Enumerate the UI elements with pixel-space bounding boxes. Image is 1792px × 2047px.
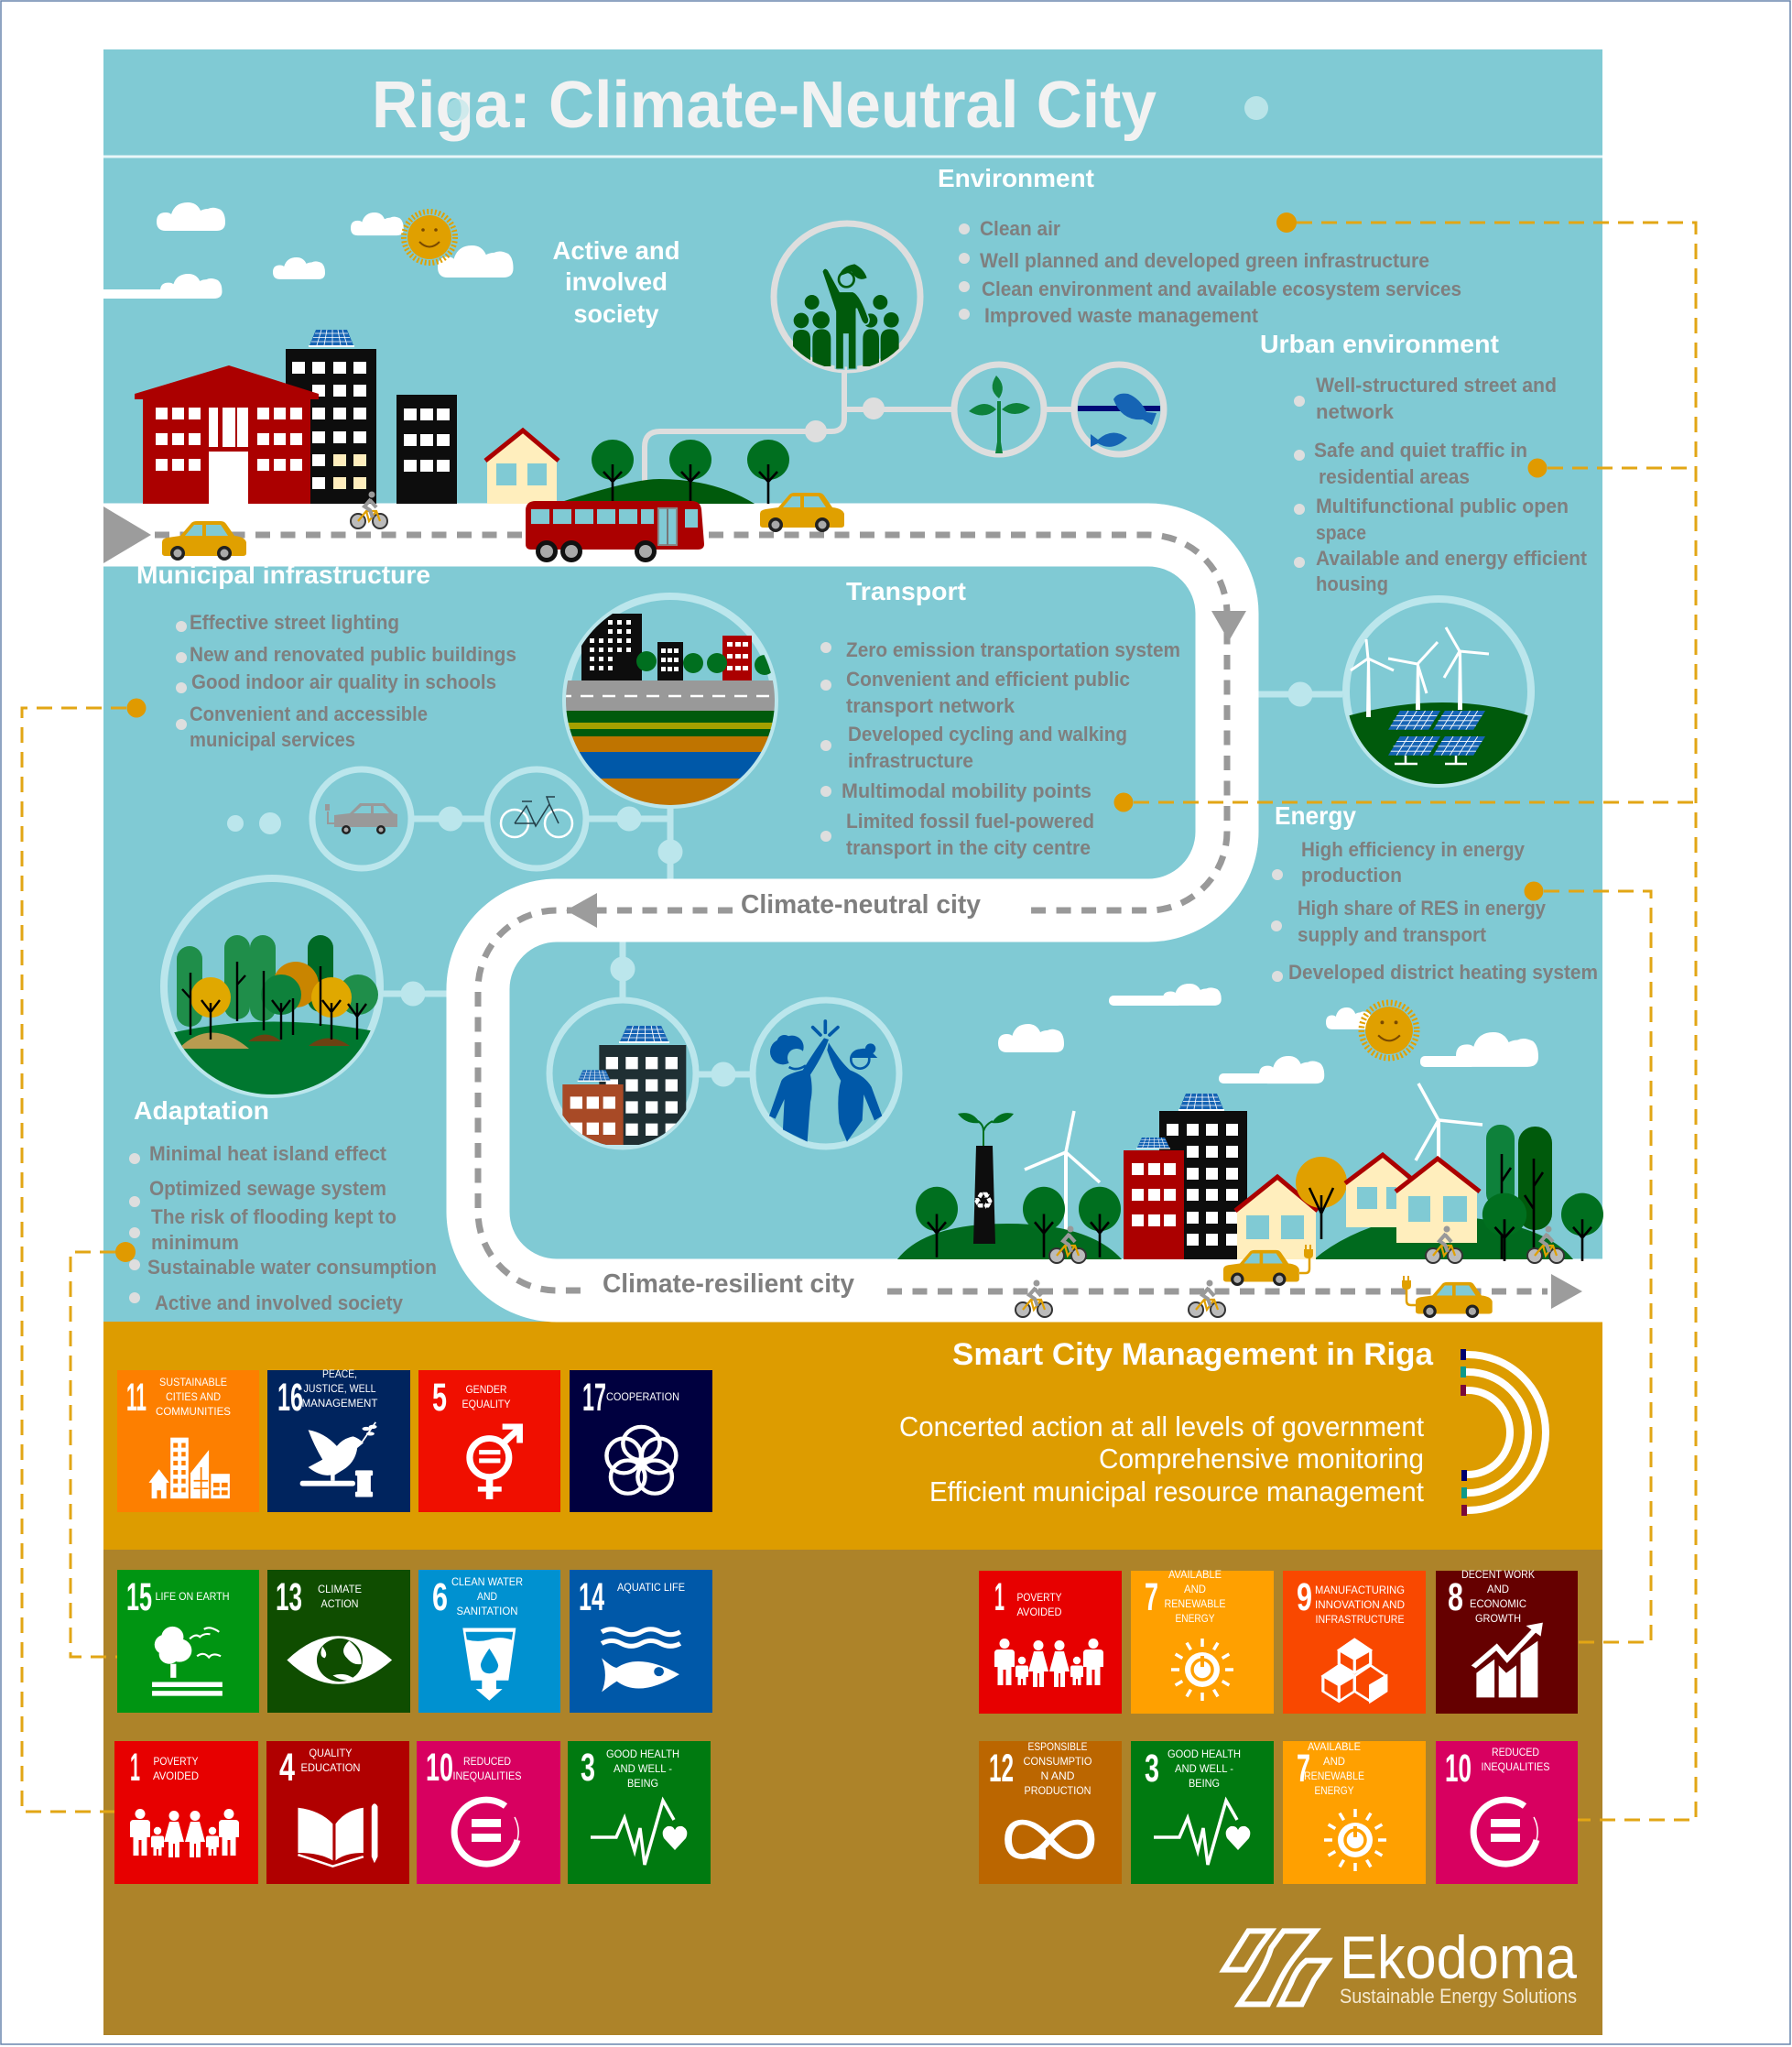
SDG tile 10 right [1436,1741,1578,1884]
text block: energy: Developed district heating system [1288,961,1598,984]
text block: urban environment: housing [1316,572,1388,595]
SDG tile 14 [570,1570,712,1713]
icon: energy circle [1337,599,1538,797]
vehicles on bottom road [1015,1245,1493,1318]
SDG tile 1 left: 1 [130,1746,140,1790]
SDG tile 11: COMMUNITIES [156,1405,231,1418]
road label: climate-resilient city: Climate-resilient city [603,1269,854,1299]
scene: right city: ♻ [972,1188,994,1215]
panel: teal climate section background [103,49,1602,1322]
text block: energy: supply and transport [1298,923,1487,946]
SDG tile 7 upper [1131,1568,1274,1714]
icon: transport infrastructure circle [559,596,778,811]
text block: transport [820,577,1180,859]
text block: smart city management: Concerted action at all levels of government [899,1410,1424,1443]
SDG tile 10 left: REDUCED [463,1755,511,1768]
text block: urban environment: Urban environment [1260,330,1499,358]
icon: electric car circle [312,769,411,868]
SDG tile 6: 6 [432,1575,448,1619]
SDG tile 5 [418,1370,560,1512]
SDG tile 13: ACTION [320,1597,359,1610]
SDG tile 4: 4 [279,1746,295,1790]
SDG tile 9 [1283,1571,1426,1714]
text block: adaptation [129,1096,437,1314]
SDG tile 7 upper: RENEWABLE [1165,1597,1225,1610]
text block: urban environment: residential areas [1319,465,1470,488]
text block: smart city management: Comprehensive monitoring [1099,1443,1424,1475]
text block: transport: Transport [846,577,966,605]
text block: transport: transport in the city centre [846,836,1091,859]
icon: buildings circle [549,1000,696,1147]
SDG tile 4 [266,1741,409,1884]
arrow: down on right bend [1211,611,1246,641]
SDG tile 10 right: REDUCED [1492,1746,1539,1758]
SDG tile 11: CITIES AND [166,1390,221,1403]
SDG tile 7 lower: RENEWABLE [1304,1769,1364,1782]
SDG tile 7 lower: AVAILABLE [1308,1740,1361,1753]
text block: environment: Clean air [980,217,1060,240]
SDG tile 8: AND [1487,1583,1509,1595]
SDG tile 3 left: AND WELL - [614,1762,672,1775]
text block: energy: High share of RES in energy [1298,897,1547,920]
SDG tile 16: 16 [277,1376,303,1420]
SDG tile 7 lower [1283,1740,1426,1884]
SDG tile 7 lower: AND [1323,1755,1345,1768]
text block: urban environment: Safe and quiet traffic in [1314,439,1527,462]
text block: environment [938,164,1461,327]
connectors: grey society branch [645,371,1071,481]
SDG tile 3 right: GOOD HEALTH [1168,1748,1241,1760]
SDG tile 14: 14 [579,1575,604,1619]
text block: municipal infrastructure [136,561,516,751]
text block: transport: Multimodal mobility points [842,779,1091,802]
scene: left city buildings [135,330,789,504]
text block: urban environment [1260,330,1588,595]
logo: Ekodoma: Ekodoma [1340,1923,1577,1991]
text block: municipal infrastructure: Convenient and accessible [190,702,428,725]
SDG tile 17: COOPERATION [606,1390,679,1403]
text block: smart city management: Smart City Management in Riga [952,1337,1434,1372]
SDG tile 8: 8 [1448,1575,1463,1619]
arrow: road end [1551,1274,1582,1309]
SDG tile 6: CLEAN WATER [451,1575,523,1588]
icon: bicycle circle [487,769,586,868]
text block: municipal infrastructure: Effective street lighting [190,611,399,634]
text block: transport: transport network [846,694,1015,717]
SDG tile 5: GENDER [465,1383,507,1396]
text block: urban environment: network [1316,400,1395,423]
SDG tile 11 [117,1370,259,1512]
SDG tile 12: 12 [989,1747,1014,1791]
SDG tile 1 left: POVERTY [154,1755,198,1768]
SDG tile 13: CLIMATE [318,1583,362,1595]
text block: transport: Zero emission transportation system [846,638,1180,661]
SDG tile 7 upper: ENERGY [1176,1612,1214,1625]
icon: plant circle [954,365,1044,454]
logo: Ekodoma [1224,1923,1577,2008]
text block: municipal infrastructure: Municipal infrastructure [136,561,430,589]
scene: left city sky [103,202,513,299]
SDG tile 11: SUSTAINABLE [159,1376,227,1388]
SDG tile 1 right: AVOIDED [1016,1606,1062,1618]
SDG tile 16: PEACE, [322,1367,357,1380]
SDG tile 1 left: AVOIDED [153,1769,199,1782]
text block: active and involved society [553,236,679,328]
SDG tile 7 upper: AND [1184,1583,1206,1595]
SDG tile 16 [267,1367,410,1512]
title: Riga: Climate-Neutral City [372,69,1157,142]
SDG tile 10 left [417,1741,560,1884]
SDG tile 10 right: INEQUALITIES [1482,1760,1549,1773]
arrow: road start [103,506,151,563]
SDG tile 10 left: 10 [426,1746,453,1790]
SDG tile 8: GROWTH [1475,1612,1521,1625]
dashed connector lines [22,223,1696,1820]
SDG tile 15: 15 [126,1575,152,1619]
SDG tile 7 lower: ENERGY [1315,1784,1353,1797]
SDG tile 3 left [568,1741,711,1884]
SDG tile 8: ECONOMIC [1470,1597,1526,1610]
SDG tile 16: JUSTICE, WELL [304,1382,376,1395]
SDG tile 6: SANITATION [456,1605,518,1617]
text block: adaptation: Active and involved society [155,1291,404,1314]
text block: transport: infrastructure [848,749,973,772]
text block: municipal infrastructure: New and renovated public buildings [190,643,516,666]
text block: adaptation: Sustainable water consumption [147,1256,437,1279]
SDG tile 3 right [1131,1741,1274,1884]
panel: brown SDG and logo background [103,1550,1602,2035]
SDG tile 1 right: 1 [994,1575,1005,1619]
SDG tile 10 left: INEQUALITIES [452,1769,522,1782]
text block: energy: Energy [1275,801,1356,830]
text block: environment: Environment [938,164,1094,192]
SDG tile 14: AQUATIC LIFE [617,1581,685,1594]
SDG tile 13 [267,1570,410,1713]
icon: high five circle [753,1000,899,1147]
arrow: left on middle road [566,893,597,928]
SDG tile 17: 17 [582,1376,606,1420]
vehicles on top road [162,491,844,562]
panel: gold smart city management background [103,1322,1602,1550]
text block: environment: Improved waste management [984,304,1259,327]
text block: energy [1271,801,1598,984]
text block: transport: Developed cycling and walking [848,723,1127,746]
SDG tile 3 left: BEING [627,1777,658,1790]
SDG tile 6 [418,1570,560,1713]
SDG tile 5: EQUALITY [462,1398,511,1410]
SDG tile 15 [117,1570,259,1713]
road label: climate-neutral city: Climate-neutral city [741,890,981,920]
SDG tile 9: 9 [1297,1575,1312,1619]
SDG tile 16: MANAGEMENT [302,1397,378,1410]
text block: adaptation: Optimized sewage system [149,1177,386,1200]
text block: transport: Convenient and efficient public [846,668,1130,691]
icon: active society circle [774,223,920,370]
SDG tile 3 right: BEING [1189,1777,1220,1790]
SDG tile 5: 5 [432,1376,447,1420]
SDG tile 17 [570,1370,712,1512]
SDG tile 12: N AND [1040,1769,1075,1782]
text block: smart city management [899,1337,1434,1508]
icon: adaptation forest circle [156,878,394,1108]
trailing dots [227,812,281,834]
SDG tile 4: EDUCATION [300,1761,361,1774]
SDG tile 10 right: 10 [1445,1747,1472,1791]
text block: urban environment: Available and energy efficient [1316,547,1588,570]
SDG tile 9: INNOVATION AND [1315,1598,1405,1611]
text block: transport: Limited fossil fuel-powered [846,810,1094,833]
SDG tile 13: 13 [276,1575,302,1619]
text block: adaptation: The risk of flooding kept to [151,1205,396,1228]
text block: adaptation: minimum [151,1231,239,1254]
SDG tile 8: DECENT WORK [1461,1568,1535,1581]
SDG tile 11: 11 [126,1376,147,1420]
SDG tile 7 lower: 7 [1297,1747,1310,1791]
SDG tile 1 right: POVERTY [1016,1591,1062,1604]
SDG tile 1 left [114,1741,258,1884]
road [103,535,1602,1291]
text block: energy: High efficiency in energy [1301,838,1526,861]
link dots [115,212,1548,1262]
text block: active and involved society: involved [565,267,668,296]
SDG tile 7 upper: AVAILABLE [1168,1568,1222,1581]
SDG tile 3 left: GOOD HEALTH [606,1748,679,1760]
text block: urban environment: space [1316,521,1366,544]
SDG tile 6: AND [477,1590,497,1603]
SDG tile 9: MANUFACTURING [1315,1584,1405,1596]
icon: fish circle [1074,365,1164,454]
logo: Ekodoma: Sustainable Energy Solutions [1340,1985,1577,2008]
text block: environment: Clean environment and available ecosystem services [982,278,1461,300]
text block: municipal infrastructure: Good indoor air quality in schools [191,670,496,693]
SDG tile 8 [1436,1568,1578,1714]
connectors: light blue branches [382,685,1342,1083]
SDG tile 3 right: AND WELL - [1175,1762,1233,1775]
text block: active and involved society: Active and [553,236,679,265]
SDG tile 12: ESPONSIBLE [1027,1740,1088,1753]
text block: adaptation: Adaptation [134,1096,269,1125]
SDG tile 15: LIFE ON EARTH [156,1590,229,1603]
SDG tile 12: PRODUCTION [1024,1784,1091,1797]
text block: environment: Well planned and developed green infrastructure [980,249,1429,272]
text block: active and involved society: society [573,299,659,328]
text block: urban environment: Well-structured street and [1316,374,1557,397]
scene: right city sky [998,984,1538,1083]
text block: urban environment: Multifunctional public open [1316,495,1569,517]
text block: energy: production [1301,864,1402,887]
SDG tile 3 right: 3 [1145,1747,1159,1791]
SDG tile 12: CONSUMPTIO [1024,1755,1091,1768]
SDG tile 3 left: 3 [581,1746,595,1790]
title [103,69,1602,158]
scene: right city [897,1083,1603,1263]
text block: municipal infrastructure: municipal services [190,728,355,751]
SDG tile 1 right [979,1571,1122,1714]
SDG tile 7 upper: 7 [1145,1575,1158,1619]
SDG tile 4: QUALITY [310,1747,352,1759]
SDG tile 12 [979,1740,1122,1884]
icon: concentric arcs [1461,1349,1546,1516]
text block: smart city management: Efficient municipal resource management [929,1475,1424,1508]
SDG tile 9: INFRASTRUCTURE [1315,1613,1405,1626]
text block: adaptation: Minimal heat island effect [149,1142,387,1165]
